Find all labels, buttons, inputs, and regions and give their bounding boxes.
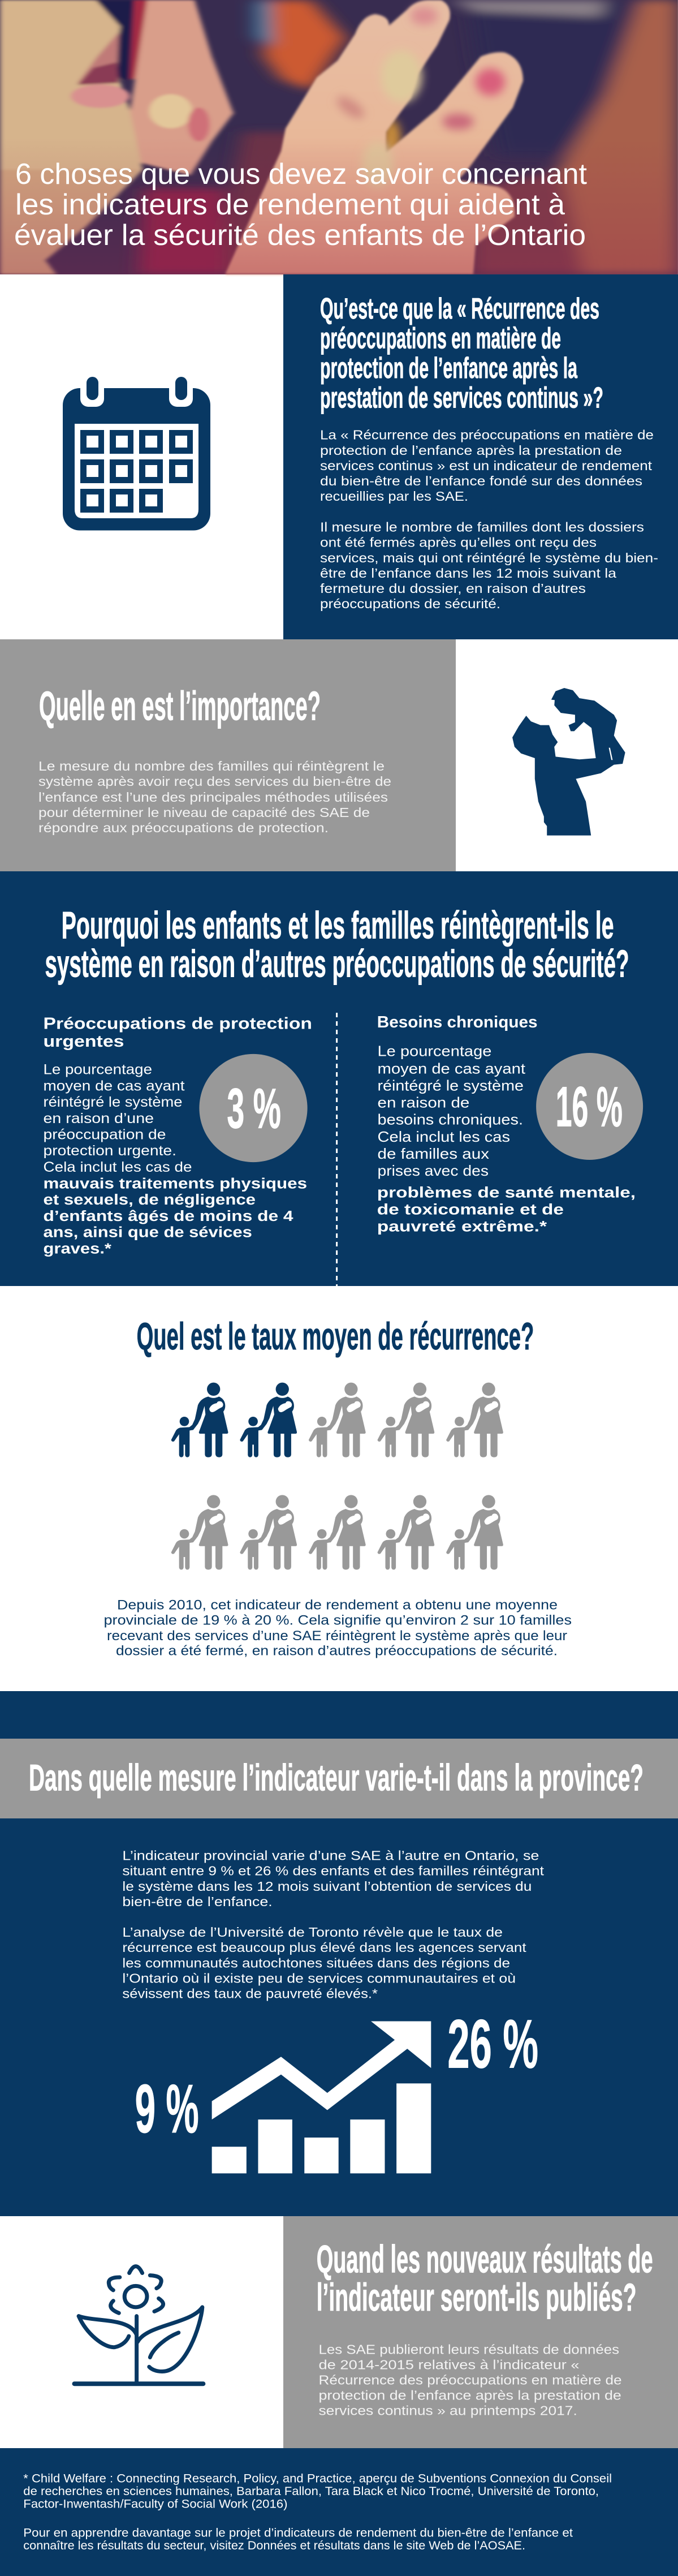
- hero photo: child's hands and face: [0, 0, 678, 274]
- text block: publication date: Récurrence des préoccupations en matière de: [319, 2372, 622, 2387]
- subheading: urgent: Préoccupations de protection: [43, 1014, 312, 1033]
- text block: learn more: Pour en apprendre davantage sur le projet d’indicateurs de rendement du bien-être de l’enfance et: [23, 2527, 573, 2539]
- text block: average rate explanation: Depuis 2010, cet indicateur de rendement a obtenu une moyenne: [117, 1598, 558, 1613]
- text block: urgent body: protection urgente.: [43, 1143, 176, 1159]
- text block: chronic bold: [377, 1184, 636, 1235]
- text block: importance: pour déterminer le niveau de capacité des SAE de: [38, 805, 370, 820]
- text block: university analysis: les communautés autochtones situées dans des régions de: [122, 1955, 510, 1970]
- text block: urgent body: en raison d’une: [43, 1111, 154, 1126]
- text block: measure: Il mesure le nombre de familles dont les dossiers: [320, 520, 644, 535]
- text block: urgent body: préoccupation de: [43, 1127, 166, 1143]
- chart: rising bars and arrow: [212, 2022, 431, 2173]
- text block: measure: ont été fermés après qu’elles ont reçu des: [320, 535, 597, 550]
- text block: variation range: L’indicateur provincial varie d’une SAE à l’autre en Ontario, se: [122, 1848, 539, 1863]
- divider: dashed: [336, 1013, 338, 1286]
- text block: publication date: [319, 2342, 622, 2418]
- text block: university analysis: L’analyse de l’Université de Toronto révèle que le taux de: [122, 1925, 503, 1939]
- text block: university analysis: sévissent des taux de pauvreté élevés.*: [122, 1986, 378, 2001]
- text block: citation: Factor-Inwentash/Faculty of Social Work (2016): [23, 2497, 288, 2510]
- text block: chronic body: prises avec des: [378, 1162, 489, 1179]
- stat: 9 %: 9 %: [135, 2070, 199, 2147]
- panel: footer: [0, 2448, 678, 2576]
- stat: 26 %: 26 %: [447, 2006, 538, 2083]
- text block: urgent bold: graves.*: [43, 1241, 111, 1257]
- text block: measure: être de l’enfance dans les 12 mois suivant la: [320, 566, 616, 580]
- subheading: urgent: urgentes: [43, 1033, 124, 1051]
- text block: measure: fermeture du dossier, en raison d’autres: [320, 581, 586, 596]
- text block: chronic body: moyen de cas ayant: [378, 1060, 526, 1077]
- text block: variation range: le système dans les 12 mois suivant l’obtention de services du: [122, 1879, 532, 1894]
- text block: learn more: connaître les résultats du secteur, visitez Données et résultats dans le site Web de l’AOSAE.: [23, 2539, 525, 2552]
- text block: measure: [320, 520, 658, 611]
- text block: urgent body: [43, 1062, 192, 1175]
- heading: what is it: [320, 293, 603, 414]
- text block: importance: répondre aux préoccupations de protection.: [38, 820, 329, 835]
- text block: university analysis: l’Ontario où il existe peu de services communautaires et où: [122, 1971, 516, 1986]
- text block: variation range: bien-être de l’enfance.: [122, 1894, 273, 1909]
- stat: 16 %: [536, 1053, 643, 1160]
- heading: importance: Quelle en est l’importance?: [39, 684, 321, 729]
- text block: university analysis: récurrence est beaucoup plus élevé dans les agences servant: [122, 1940, 526, 1955]
- text block: measure: services, mais qui ont réintégré le système du bien-: [320, 551, 658, 565]
- panel: what is it: [283, 274, 678, 639]
- text block: urgent body: réintégré le système: [43, 1094, 182, 1110]
- text block: chronic body: Cela inclut les cas: [378, 1128, 510, 1145]
- text block: definition: [320, 428, 654, 504]
- banner: variation heading: [0, 1739, 678, 1818]
- text block: urgent body: Le pourcentage: [43, 1062, 152, 1078]
- text block: definition: La « Récurrence des préoccupations en matière de: [320, 428, 654, 442]
- panel: why families re-enter: [0, 871, 678, 1286]
- text block: definition: recueillies par les SAE.: [320, 489, 468, 504]
- text block: variation range: situant entre 9 % et 26 % des enfants et des familles réintégrant: [122, 1864, 545, 1878]
- hero title: [14, 158, 588, 252]
- text block: publication date: services continus » au printemps 2017.: [319, 2403, 577, 2418]
- text block: average rate explanation: recevant des services d’une SAE réintègrent le système après que leur: [107, 1628, 567, 1644]
- chart: pictogram of 10 families, 2 highlighted: [171, 1383, 503, 1569]
- text block: chronic body: en raison de: [378, 1094, 469, 1111]
- text block: urgent bold: mauvais traitements physiques: [43, 1176, 307, 1192]
- hero title: évaluer la sécurité des enfants de l’Ontario: [14, 219, 586, 252]
- text block: variation range: [122, 1848, 545, 1909]
- text block: publication date: Les SAE publieront leurs résultats de données: [319, 2342, 619, 2356]
- text block: urgent bold: d’enfants âgés de moins de 4: [43, 1209, 294, 1224]
- text block: citation: * Child Welfare : Connecting Research, Policy, and Practice, aperçu de Subventions Connexion du Conseil: [23, 2472, 612, 2485]
- text block: chronic body: Le pourcentage: [378, 1043, 491, 1060]
- stat: 3 %: [199, 1054, 308, 1162]
- text block: learn more: [23, 2527, 573, 2552]
- icon: calendar: [63, 373, 210, 531]
- heading: why families re-enter: [45, 904, 629, 986]
- text block: chronic body: [378, 1043, 526, 1179]
- text block: chronic bold: problèmes de santé mentale,: [377, 1184, 636, 1201]
- panel: importance: [0, 639, 456, 871]
- text block: chronic body: besoins chroniques.: [378, 1111, 523, 1128]
- text block: definition: protection de l’enfance après la prestation de: [320, 443, 622, 458]
- heading: publication date: [317, 2238, 653, 2319]
- text block: importance: [38, 759, 391, 835]
- text block: urgent body: moyen de cas ayant: [43, 1078, 185, 1094]
- text block: publication date: protection de l’enfance après la prestation de: [319, 2388, 621, 2402]
- text block: chronic bold: pauvreté extrême.*: [377, 1218, 547, 1235]
- text block: average rate explanation: provinciale de 19 % à 20 %. Cela signifie qu’environ 2 sur 10 familles: [104, 1612, 572, 1628]
- text block: definition: services continus » est un indicateur de rendement: [320, 458, 653, 473]
- text block: chronic bold: de toxicomanie et de: [377, 1201, 564, 1218]
- hero title: 6 choses que vous devez savoir concernant: [15, 158, 588, 191]
- column: urgent protection concerns: [43, 1014, 312, 1257]
- icon: parent lifting child silhouette: [512, 688, 625, 836]
- text block: measure: préoccupations de sécurité.: [320, 596, 500, 611]
- panel: provincial variation: [0, 1691, 678, 2216]
- text block: average rate explanation: dossier a été fermé, en raison d’autres préoccupations de sécurité.: [116, 1643, 558, 1659]
- stat: 3 %: 3 %: [227, 1077, 281, 1140]
- text block: citation: [23, 2472, 612, 2510]
- text block: importance: système après avoir reçu des services du bien-être de: [38, 774, 391, 789]
- text block: definition: du bien-être de l’enfance fondé sur des données: [320, 474, 642, 488]
- text block: urgent bold: [43, 1176, 307, 1257]
- hero title: les indicateurs de rendement qui aident à: [15, 188, 565, 221]
- text block: urgent bold: et sexuels, de négligence: [43, 1192, 256, 1208]
- subheading: chronic: Besoins chroniques: [377, 1013, 537, 1031]
- subheading: urgent: [43, 1014, 312, 1051]
- text block: citation: de recherches en sciences humaines, Barbara Fallon, Tara Black et Nico Trocmé, Université de Toronto,: [23, 2485, 599, 2498]
- text block: chronic body: de familles aux: [378, 1145, 489, 1162]
- text block: urgent bold: ans, ainsi que de sévices: [43, 1225, 252, 1241]
- text block: importance: Le mesure du nombre des familles qui réintègrent le: [38, 759, 385, 773]
- text block: publication date: de 2014-2015 relatives à l’indicateur «: [319, 2357, 580, 2372]
- icon: flower: [75, 2267, 203, 2384]
- text block: urgent body: Cela inclut les cas de: [43, 1159, 192, 1175]
- column: chronic needs: [377, 1013, 643, 1235]
- text block: university analysis: [122, 1925, 526, 2001]
- text block: chronic body: réintégré le système: [378, 1077, 524, 1094]
- panel: publication date: [283, 2216, 678, 2448]
- text block: importance: l’enfance est l’une des principales méthodes utilisées: [38, 790, 388, 805]
- text block: average rate explanation: [104, 1598, 572, 1659]
